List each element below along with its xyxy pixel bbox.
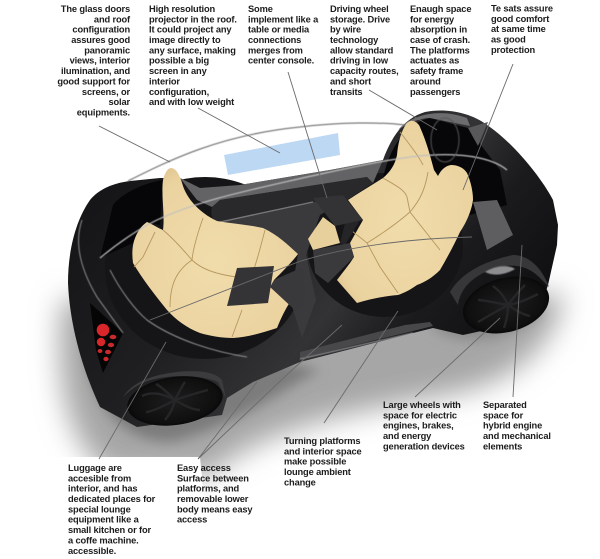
text: projector: High resolution — [149, 4, 216, 14]
text: driving wheel: and short — [330, 76, 371, 86]
text: glass doors: The glass doors — [61, 4, 130, 14]
text: implement table: table or media — [248, 25, 310, 35]
text: driving wheel: storage. Drive — [330, 14, 390, 24]
roof side grey band — [180, 160, 383, 207]
wheel arch right — [450, 255, 549, 305]
floor recess — [211, 177, 373, 222]
leader lines — [99, 64, 522, 459]
text: turning platforms: and interior space — [284, 446, 362, 456]
text: luggage: equipment like a — [68, 515, 140, 525]
text: luggage: interior, and has — [68, 484, 137, 494]
text: energy absorption: safety frame — [410, 66, 463, 76]
text: energy absorption: passengers — [410, 87, 460, 97]
seat: left lounge — [132, 168, 298, 338]
leader: glass doors — [99, 126, 170, 162]
text: energy absorption: for energy — [410, 14, 455, 24]
text: turning platforms: lounge ambient — [284, 467, 351, 477]
text: implement table: Some — [248, 4, 273, 14]
text: implement table: implement like a — [248, 14, 319, 24]
text: projector: image directly to — [149, 35, 221, 45]
text: glass doors: solar — [108, 97, 131, 107]
wheel: front left — [124, 371, 226, 431]
text: glass doors: panoramic — [84, 45, 130, 55]
text: luggage: small kitchen or for — [68, 525, 151, 535]
floor between seats — [212, 177, 373, 338]
body shell — [68, 111, 558, 427]
leader: luggage — [99, 342, 166, 459]
text: driving wheel: allow standard — [330, 45, 394, 55]
highlight on rear arch — [485, 266, 515, 275]
text: glass doors: ilumination, and — [61, 66, 130, 76]
text: separated space: hybrid engine — [483, 421, 542, 431]
text: seats: good comfort — [491, 14, 549, 24]
car body — [68, 111, 558, 427]
text: energy absorption: absorption in — [410, 25, 468, 35]
text: separated space: Separated — [483, 400, 527, 410]
text: implement table: center console. — [248, 56, 314, 66]
text: large wheels: Large wheels with — [383, 400, 461, 410]
text: driving wheel: technology — [330, 35, 379, 45]
text: turning platforms: Turning platforms — [284, 436, 360, 446]
glass outline curves — [79, 118, 507, 357]
text: seats: Te sats assure — [491, 4, 553, 14]
text: easy access: access — [177, 515, 207, 525]
lower sill — [300, 322, 433, 358]
text: driving wheel: transits — [330, 87, 362, 97]
dark interior well left — [100, 180, 163, 258]
platform disc right — [307, 173, 463, 317]
seat: centre fragment — [308, 217, 340, 250]
leader: projector — [198, 108, 280, 153]
text: glass doors: and roof — [94, 14, 131, 24]
text: projector: interior — [149, 76, 180, 86]
text: luggage: special lounge — [68, 504, 131, 514]
text: implement table: merges from — [248, 45, 303, 55]
text: easy access: Surface between — [177, 473, 249, 483]
grey rear side panel — [473, 200, 513, 250]
leader: implement table — [288, 72, 327, 198]
text: seats: protection — [491, 45, 536, 55]
ground shadow — [60, 290, 565, 475]
text: glass doors: screens, or — [82, 87, 131, 97]
leader: easy access one — [198, 382, 257, 459]
table: left — [227, 266, 305, 312]
text: luggage: accesible from — [68, 473, 131, 483]
text: driving wheel: by wire — [330, 25, 361, 35]
leader: across seats — [150, 237, 472, 320]
leader: driving wheel — [369, 90, 437, 130]
text: large wheels: space for electric — [383, 410, 457, 420]
text: glass doors: equipments. — [77, 108, 130, 118]
text: turning platforms: make possible — [284, 457, 346, 467]
text: large wheels: generation devices — [383, 441, 465, 451]
leader: large wheels — [415, 318, 500, 397]
text: projector: and with low weight — [149, 97, 234, 107]
text: separated space: space for — [483, 410, 524, 420]
text: easy access: platforms, and — [177, 484, 240, 494]
text: glass doors: assures good — [71, 35, 130, 45]
text: energy absorption: The platforms — [410, 45, 470, 55]
leader: seats — [463, 64, 513, 190]
projected screen on roof — [224, 133, 340, 175]
text: separated space: and mechanical — [483, 431, 551, 441]
text: energy absorption: actuates as — [410, 56, 459, 66]
text: separated space: elements — [483, 441, 522, 451]
text: projector: screen in any — [149, 66, 208, 76]
text: luggage: accessible. — [68, 546, 116, 556]
text: projector: projector in the roof. — [149, 14, 237, 24]
dark interior well right — [383, 118, 507, 215]
text: large wheels: and energy — [383, 431, 432, 441]
leader: separated space — [513, 245, 522, 397]
text: glass doors: configuration — [72, 25, 130, 35]
text: glass doors: good support for — [57, 76, 131, 86]
text: turning platforms: change — [284, 477, 316, 487]
text: seats: at same time — [491, 24, 546, 34]
text: seats: as good — [491, 34, 526, 44]
text: driving wheel: Driving wheel — [330, 4, 389, 14]
text: large wheels: engines, brakes, — [383, 421, 454, 431]
text: projector: configuration, — [149, 87, 209, 97]
text: luggage: a coffe machine. — [68, 535, 139, 545]
small panel at rear — [468, 122, 488, 146]
platform disc left — [105, 177, 305, 359]
leader: turning platforms — [324, 311, 398, 423]
text: luggage: dedicated places for — [68, 494, 156, 504]
text: energy absorption: Enaugh space — [410, 4, 471, 14]
wheel: rear right — [457, 268, 555, 342]
text: projector: any surface, making — [149, 45, 236, 55]
seat: right lounge — [337, 121, 473, 303]
wheel arch left — [123, 371, 226, 398]
text: glass doors: views, interior — [70, 56, 131, 66]
text: luggage: Luggage are — [68, 463, 122, 473]
text: easy access: body means easy — [177, 504, 253, 514]
leader: easy access two — [198, 325, 342, 459]
text: projector: It could project any — [149, 25, 232, 35]
table: center — [313, 195, 363, 283]
text: easy access: removable lower — [177, 494, 249, 504]
text: implement table: connections — [248, 35, 301, 45]
text: projector: possible a big — [149, 56, 209, 66]
top cap of rear body — [398, 113, 470, 130]
text: energy absorption: around — [410, 76, 441, 86]
text: easy access: Easy access — [177, 463, 231, 473]
rear light cluster — [90, 303, 123, 373]
text: driving wheel: capacity routes, — [330, 66, 399, 76]
text: driving wheel: driving in low — [330, 56, 389, 66]
text: energy absorption: case of crash. — [410, 35, 470, 45]
